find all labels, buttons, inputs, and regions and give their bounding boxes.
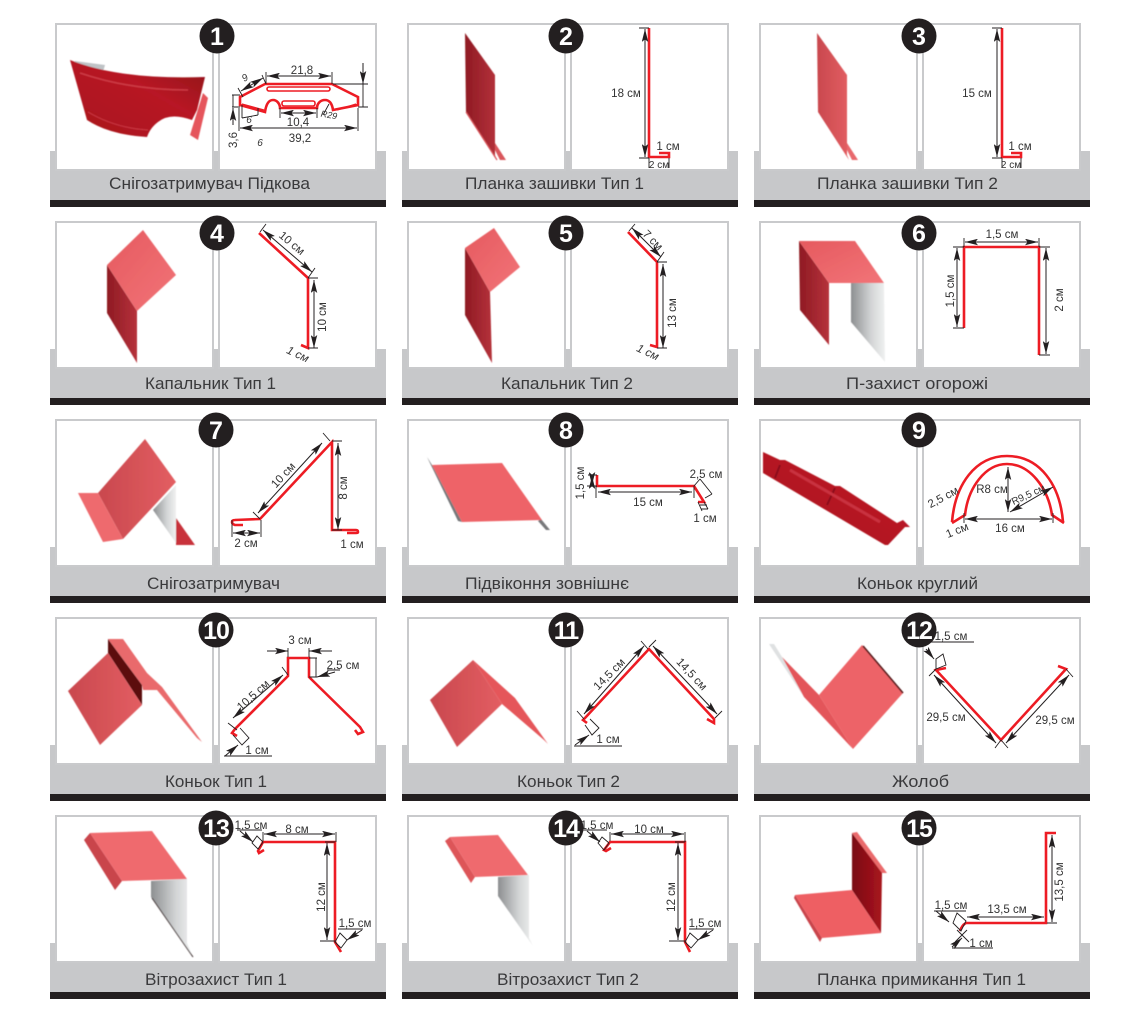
number badge 8 [548, 412, 584, 448]
dimension diagram 10 [224, 635, 363, 757]
label 3: Планка зашивки Тип 2 [817, 174, 998, 193]
number badge 7 [198, 412, 234, 448]
label 14: Вітрозахист Тип 2 [497, 970, 639, 989]
dimension diagram 4: 1 см [285, 345, 311, 365]
dimension diagram 15: 1,5 см [935, 900, 968, 912]
number badge 2 [548, 18, 584, 54]
number badge 7: 7 [209, 417, 223, 445]
number badge 3: 3 [912, 23, 926, 51]
dimension diagram 9: 16 см [995, 523, 1025, 535]
dimension diagram 6 [945, 229, 1066, 355]
dimension diagram 1 [228, 63, 368, 149]
dimension diagram 8: 15 см [633, 497, 663, 509]
number badge 6 [902, 216, 936, 250]
dimension diagram 11: 1 см [596, 734, 620, 746]
card 6: П-захист огорожі [754, 216, 1090, 405]
dimension diagram 11: 14,5 см [592, 657, 628, 693]
dimension diagram 1: 21,8 [291, 65, 313, 77]
dimension diagram 15: 13,5 см [987, 904, 1027, 916]
dimension diagram 8: 2,5 см [690, 469, 723, 481]
panel frame 13 [50, 816, 386, 999]
dimension diagram 1: 9 [240, 72, 251, 85]
dimension diagram 12: 29,5 см [926, 712, 966, 724]
dimension diagram 2: 18 см [611, 88, 641, 100]
product image 8 [427, 457, 550, 530]
dimension diagram 11 [574, 640, 722, 746]
dimension diagram 10: 10,5 см [235, 678, 272, 713]
dimension diagram 6: 1,5 см [986, 229, 1019, 241]
product image 14 [445, 835, 533, 946]
dimension diagram 7: 10 см [269, 461, 298, 491]
panel frame 11 [402, 618, 738, 801]
product image 1 [70, 60, 208, 140]
dimension diagram 5 [628, 224, 679, 363]
dimension diagram 3: 15 см [962, 88, 992, 100]
number badge 15 [902, 810, 936, 846]
dimension diagram 9: R9,5 см [1010, 483, 1047, 508]
dimension diagram 15: 13,5 см [1054, 862, 1066, 902]
product image 5 [465, 228, 520, 363]
number badge 4: 4 [210, 220, 224, 248]
dimension diagram 1: R29 [320, 109, 338, 121]
number badge 8: 8 [559, 417, 573, 445]
label 9: Коньок круглий [857, 574, 978, 593]
dimension diagram 10: 2,5 см [327, 660, 360, 672]
number badge 14 [548, 810, 584, 846]
dimension diagram 13 [235, 820, 372, 952]
dimension diagram 12: 1,5 см [935, 631, 968, 643]
number badge 6: 6 [912, 220, 926, 248]
dimension diagram 7 [232, 433, 364, 551]
card 12: Жолоб [754, 612, 1090, 801]
panel frame 9 [754, 420, 1090, 603]
dimension diagram 15: 1 см [969, 938, 993, 950]
dimension diagram 5: 1 см [635, 343, 661, 363]
product image 4 [107, 230, 176, 363]
number badge 14: 14 [553, 815, 580, 843]
dimension diagram 6: 1,5 см [945, 274, 957, 307]
dimension diagram 9: 2,5 см [926, 485, 961, 511]
dimension diagram 13: 1,5 см [235, 820, 268, 832]
dimension diagram 15 [934, 833, 1066, 950]
dimension diagram 11: 14,5 см [674, 656, 709, 693]
number badge 5 [548, 216, 584, 250]
panel frame 3 [754, 24, 1090, 207]
number badge 11 [548, 612, 584, 648]
card 5: Капальник Тип 2 [402, 216, 738, 405]
panel frame 2 [402, 24, 738, 207]
card 7: Снігозатримувач [50, 412, 386, 603]
number badge 9: 9 [912, 417, 926, 445]
number badge 4 [200, 216, 234, 250]
card 1: Снігозатримувач Підкова [50, 18, 386, 207]
dimension diagram 4: 10 см [276, 230, 307, 258]
number badge 5: 5 [559, 220, 573, 248]
card 10: Коньок Тип 1 [50, 612, 386, 801]
label 13: Вітрозахист Тип 1 [145, 970, 287, 989]
number badge 13 [198, 810, 234, 846]
dimension diagram 10: 3 см [288, 635, 312, 647]
dimension diagram 5: 7 см [640, 228, 665, 253]
card 11: Коньок Тип 2 [402, 612, 738, 801]
dimension diagram 8 [575, 466, 723, 525]
dimension diagram 14: 1,5 см [581, 820, 614, 832]
dimension diagram 7: 8 см [338, 476, 350, 500]
number badge 10 [198, 612, 234, 648]
panel frame 8 [402, 420, 738, 603]
dimension diagram 14: 12 см [666, 882, 678, 912]
dimension diagram 1: 10,4 [287, 117, 310, 129]
panel frame 7 [50, 420, 386, 603]
product image 10 [68, 639, 202, 745]
card 3: Планка зашивки Тип 2 [754, 18, 1090, 207]
dimension diagram 1: 39,2 [289, 133, 311, 145]
label 12: Жолоб [892, 772, 949, 791]
dimension diagram 3: 1 см [1008, 141, 1032, 153]
product image 6 [799, 241, 885, 362]
card 2: Планка зашивки Тип 1 [402, 18, 738, 207]
dimension diagram 14: 1,5 см [689, 918, 722, 930]
dimension diagram 4 [259, 224, 329, 365]
number badge 3 [902, 18, 936, 54]
label 15: Планка примикання Тип 1 [817, 970, 1026, 989]
card 15: Планка примикання Тип 1 [754, 810, 1090, 999]
card 8: Підвіконня зовнішнє [402, 412, 738, 603]
label 5: Капальник Тип 2 [501, 374, 633, 393]
number badge 15: 15 [906, 815, 933, 843]
panel frame 10 [50, 618, 386, 801]
dimension diagram 8: 1,5 см [575, 466, 587, 499]
dimension diagram 5: 13 см [667, 298, 679, 328]
number badge 12 [902, 612, 936, 648]
dimension diagram 1: 3,6 [228, 132, 240, 148]
dimension diagram 9 [926, 456, 1064, 541]
panel frame 14 [402, 816, 738, 999]
product image 9 [763, 452, 910, 545]
number badge 11: 11 [554, 617, 579, 645]
dimension diagram 9: R8 см [976, 484, 1008, 496]
dimension diagram 2 [611, 28, 680, 171]
panel frame 12 [754, 618, 1090, 801]
dimension diagram 2: 1 см [656, 141, 680, 153]
dimension diagram 13: 8 см [285, 824, 309, 836]
dimension diagram 14: 10 см [634, 824, 664, 836]
panel frame 5 [402, 222, 738, 405]
number badge 1 [200, 18, 234, 54]
panel frame 1 [50, 24, 386, 207]
card 13: Вітрозахист Тип 1 [50, 810, 386, 999]
label 1: Снігозатримувач Підкова [109, 174, 311, 193]
dimension diagram 3: 2 см [1001, 160, 1021, 171]
dimension diagram 7: 1 см [340, 539, 364, 551]
number badge 1: 1 [210, 23, 224, 51]
number badge 12: 12 [906, 617, 932, 645]
card 9: Коньок круглий [754, 412, 1090, 603]
product image 13 [84, 831, 193, 957]
number badge 9 [902, 412, 936, 448]
dimension diagram 8: 1 см [693, 513, 717, 525]
dimension diagram 13: 1,5 см [339, 918, 372, 930]
dimension diagram 9: 1 см [944, 521, 970, 541]
label 4: Капальник Тип 1 [145, 374, 276, 393]
dimension diagram 10: 1 см [245, 745, 269, 757]
dimension diagram 12 [926, 631, 1075, 748]
product image 2 [465, 33, 506, 160]
label 10: Коньок Тип 1 [165, 772, 267, 791]
product image 3 [817, 33, 858, 160]
label 8: Підвіконня зовнішнє [465, 574, 629, 593]
dimension diagram 3 [962, 28, 1032, 171]
panel frame 6 [754, 222, 1090, 405]
label 11: Коньок Тип 2 [517, 772, 620, 791]
card 4: Капальник Тип 1 [50, 216, 386, 405]
label 7: Снігозатримувач [147, 574, 280, 593]
dimension diagram 1: 6 [257, 138, 263, 149]
card 14: Вітрозахист Тип 2 [402, 810, 738, 999]
label 6: П-захист огорожі [846, 374, 988, 393]
product image 11 [430, 660, 548, 747]
dimension diagram 6: 2 см [1054, 288, 1066, 312]
panel frame 15 [754, 816, 1090, 999]
label 2: Планка зашивки Тип 1 [465, 174, 644, 193]
dimension diagram 2: 2 см [649, 160, 669, 171]
dimension diagram 12: 29,5 см [1035, 715, 1075, 727]
panel frame 4 [50, 222, 386, 405]
dimension diagram 14 [581, 820, 722, 952]
product image 15 [794, 832, 887, 942]
product image 7 [78, 439, 195, 545]
dimension diagram 7: 2 см [234, 538, 258, 550]
number badge 10: 10 [203, 617, 229, 645]
product image 12 [769, 644, 903, 749]
dimension diagram 1: 6 [246, 115, 252, 126]
number badge 13: 13 [203, 815, 229, 843]
number badge 2: 2 [559, 23, 573, 51]
dimension diagram 13: 12 см [316, 882, 328, 912]
dimension diagram 4: 10 см [317, 302, 329, 332]
